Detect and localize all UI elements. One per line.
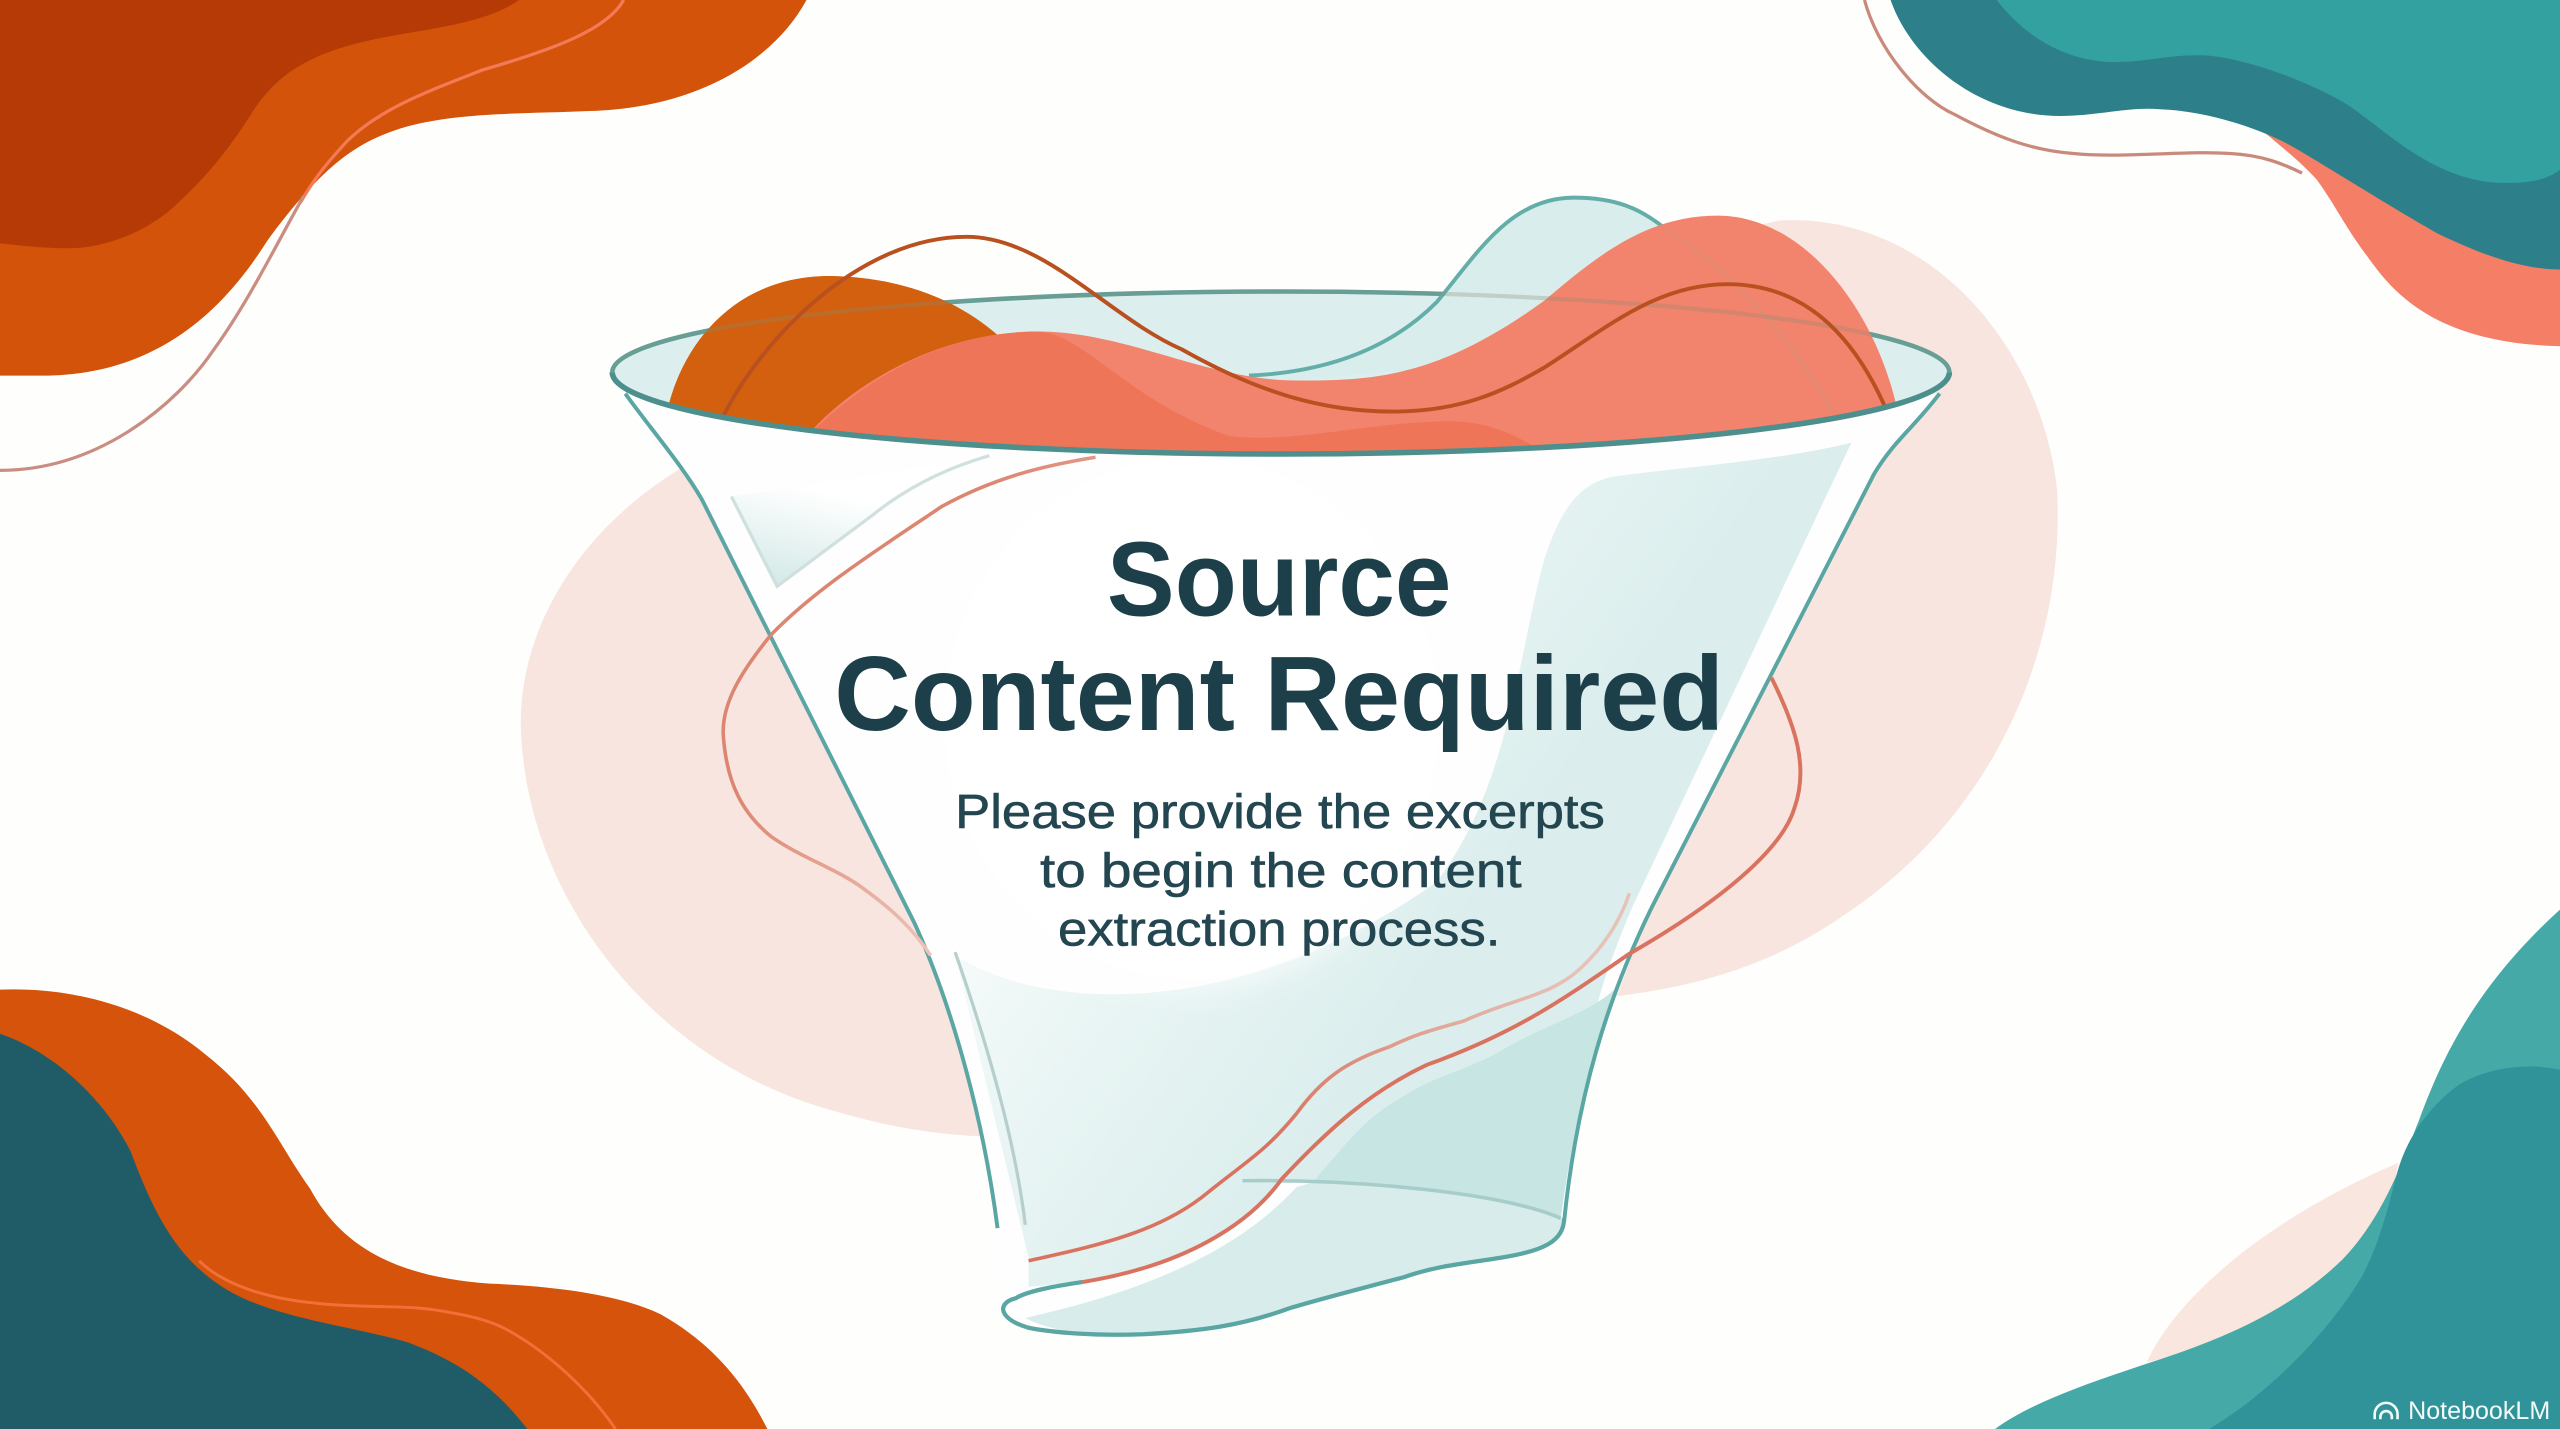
coral liquid xyxy=(814,216,1896,446)
back hem line xyxy=(1242,1181,1561,1218)
coral swirl left xyxy=(723,457,1096,955)
subtitle text: to begin the content xyxy=(1040,844,1522,898)
soft white glow behind text xyxy=(944,457,1440,980)
faint back teal line xyxy=(1665,229,1832,412)
deep coral liquid xyxy=(816,332,1532,452)
title: Source xyxy=(1107,521,1451,639)
rim back arc xyxy=(612,292,1949,372)
orange liquid xyxy=(669,276,997,428)
subtitle text xyxy=(955,785,1605,957)
top-right corner waves xyxy=(1864,0,2560,346)
teal wave xyxy=(1249,198,1731,384)
funnel right edge xyxy=(1564,394,1940,1222)
pink background blob xyxy=(521,220,2058,1137)
top-left corner waves xyxy=(0,0,807,470)
faint rim line through liquid xyxy=(612,292,1949,372)
rim glass fill xyxy=(612,293,1949,455)
top-left glass shard xyxy=(731,456,989,586)
subtitle text: extraction process. xyxy=(1058,903,1500,957)
bottom-right corner waves xyxy=(1995,910,2560,1429)
subtitle text: Please provide the excerpts xyxy=(955,785,1605,839)
coral swirl right xyxy=(1082,678,1800,1282)
lower-right darker glass xyxy=(1313,986,1618,1218)
rim front arc xyxy=(612,372,1949,454)
funnel body xyxy=(625,394,1940,1335)
funnel xyxy=(625,394,1940,1335)
funnel bottom hem xyxy=(1003,1218,1564,1335)
title xyxy=(834,521,1724,753)
coral swirl second strand xyxy=(1029,893,1629,1261)
icon: NotebookLM logo xyxy=(2375,1403,2398,1419)
glass panel xyxy=(955,443,1851,1287)
hem glass xyxy=(1025,1182,1564,1335)
funnel left edge xyxy=(625,394,998,1228)
bottom-left corner waves xyxy=(0,989,767,1429)
left inner highlight xyxy=(955,952,1025,1225)
title: Content Required xyxy=(834,635,1724,753)
funnel rim and liquid xyxy=(612,198,1949,482)
NotebookLM watermark: NotebookLM xyxy=(2408,1397,2550,1425)
brown swirl xyxy=(723,237,1886,416)
